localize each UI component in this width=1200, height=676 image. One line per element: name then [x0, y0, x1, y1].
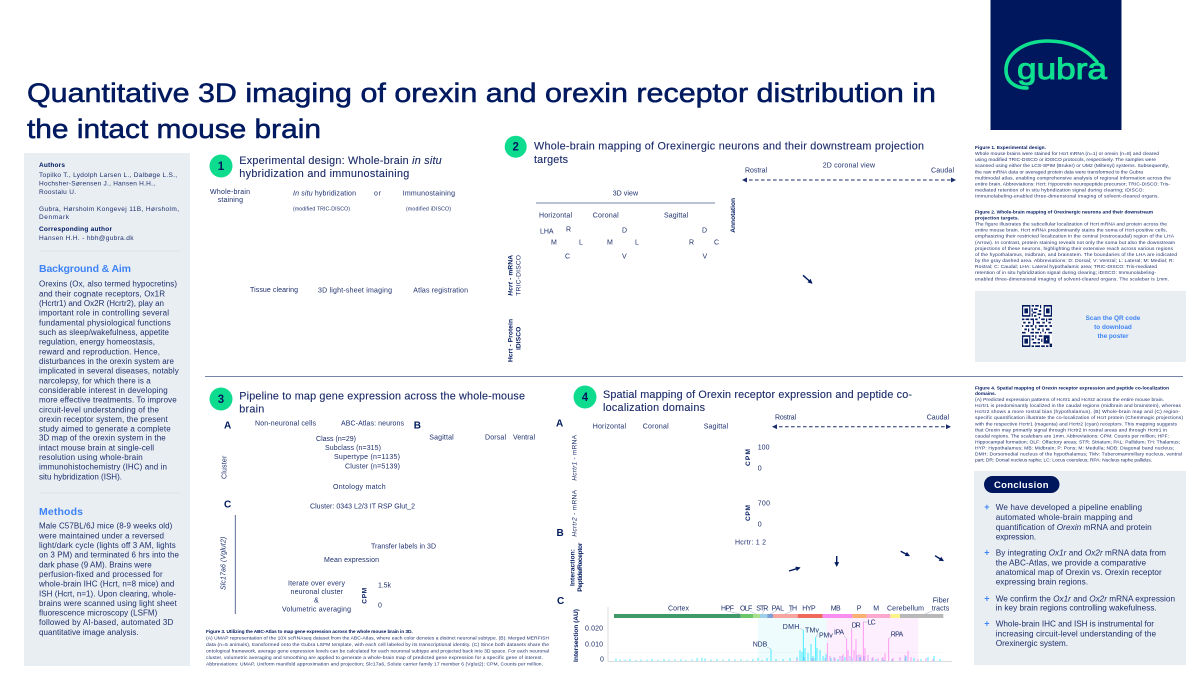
sub-panel A and B labels: Hcrtr: 1 2	[735, 540, 766, 547]
chart: region-specific colocalization: C	[557, 596, 564, 607]
text block: figure 2 caption: of the hypothalamus, midbrain, and brainstem. The boundaries of the LHA are indicated	[975, 252, 1177, 258]
text block: background: such as sleep/wakefulness, appetite	[39, 328, 170, 337]
text block: methods	[38, 522, 180, 637]
sub-panel C labels: CPM	[362, 587, 369, 604]
region labels: TH	[789, 606, 797, 613]
rotated row labels: Hcrt - mRNA	[508, 255, 515, 296]
text block: figure 3 caption: data (n=5 animals), transformed onto the Gubra LSFM template, with each cell labeled by its transcriptional identity. (C) Since both datasets share the	[206, 642, 549, 648]
heading: section 1: Experimental design: Whole-brain in situ	[239, 155, 442, 167]
text block: methods: whole-brain IHC (Hcrt, n=8 mice) and	[38, 580, 174, 589]
conclusion point 3: +	[984, 593, 990, 603]
text block: background: immunohistochemistry (IHC) and in	[39, 463, 167, 472]
QR caption: the poster	[1098, 333, 1129, 340]
sub-panel A and B labels: Cluster	[222, 455, 229, 479]
sub-panel C labels	[220, 500, 436, 614]
sub-panel A and B labels: Caudal	[927, 415, 949, 422]
heading: section 3: brain	[239, 404, 264, 416]
text block: figure 2 caption: enabled three-dimensional imaging of solvent-cleared organs. The scalebar is 1mm.	[975, 276, 1169, 282]
text block: methods: fluorescence microscopy (LSFM)	[39, 608, 158, 618]
conclusion point 1	[984, 502, 1152, 541]
text block: background: and their cognate receptors, Ox1R	[39, 289, 165, 298]
icon: section number 1: 1	[218, 161, 225, 173]
authors: Authors	[39, 162, 65, 169]
workflow labels: or	[374, 191, 382, 198]
rotated row labels: Hcrt - Protein	[508, 319, 515, 362]
conclusion point 3	[984, 593, 1175, 613]
text block: background: (Hcrtr1) and Ox2R (Hcrtr2), play an	[39, 299, 164, 308]
QR caption	[1086, 315, 1141, 340]
sub-panel A and B labels	[222, 420, 535, 491]
region labels: STR	[756, 606, 768, 613]
sub-panel A and B labels: Dorsal	[485, 434, 506, 441]
region labels: tracts	[932, 606, 950, 613]
text block: figure 3 caption: cluster, volumetric averaging and smoothing are applied to generate a whole-brain map of predicted gene expression for a specific gene of interest.	[206, 655, 543, 661]
icon: section number 1	[210, 154, 232, 178]
sub-panel C labels: neuronal cluster	[290, 589, 344, 596]
text block: figure 2 caption: (Arrow). In contrast, protein staining reveals not only the soma but also the downstream	[975, 240, 1175, 246]
conclusion point 4: Orexinergic system.	[996, 639, 1068, 648]
conclusion point 4: Whole-brain IHC and ISH is instrumental for	[996, 620, 1154, 629]
2D coronal view axis	[743, 163, 955, 180]
sub-panel A and B labels: Peptide/Receptor	[577, 542, 584, 592]
sub-panel A and B labels: Subclass (n=315)	[325, 445, 381, 452]
title: the intact mouse brain	[27, 114, 321, 144]
text block: background: implicated in several diseases, notably	[39, 367, 179, 376]
sub-panel A and B labels: Hcrtr2 - mRNA	[572, 489, 579, 537]
text block: figure 3 caption: (A) UMAP representation of the 10X scRNAseq dataset from the ABC-Atlas, where each color denotes a distinct neuronal subtype. (B): Merged MERFISH	[206, 636, 549, 642]
region labels: M	[873, 606, 879, 613]
sub-panel A and B labels: A	[224, 420, 231, 431]
panel: QR code	[975, 291, 1186, 362]
sub-panel C labels: Mean expression	[324, 557, 379, 564]
peak labels: PMv	[819, 632, 833, 639]
peak labels: NDB	[753, 642, 768, 649]
heading: section 3	[239, 390, 525, 416]
text block: background: important role in controlling several	[39, 309, 169, 318]
region labels: Cortex	[668, 606, 690, 613]
icon: section number 3	[210, 388, 232, 410]
text block: figure 2 caption: emphasizing their restricted localization in the central (rostrocaudal) region of the LHA	[975, 234, 1175, 240]
sub-panel C labels: C	[224, 500, 231, 511]
authors	[39, 162, 179, 242]
text block: background: intact mouse brain at single-cell	[39, 443, 154, 452]
3D view labels: L	[635, 240, 639, 247]
text block: background: more effective treatments. To improve	[39, 396, 177, 405]
3D view labels: Horizontal	[539, 213, 572, 220]
text block: figure 4 caption	[975, 385, 1183, 464]
sub-panel A and B labels: Class (n=29)	[316, 436, 356, 443]
region labels: HPF	[721, 606, 734, 613]
rotated row labels	[508, 198, 737, 362]
text block: methods: ISH (Hcrt, n=1). Upon clearing, whole-	[39, 589, 176, 598]
text block: figure 4 caption: DMH: Dorsomedial nucleus of the hypothalamus; TMv: Tuberomammillary nucleus, ventral	[975, 452, 1182, 458]
text block: methods: were maintained under a reversed	[38, 531, 164, 540]
icon: section number 2	[505, 136, 527, 158]
text block: methods: followed by AI-based, automated 3D	[39, 618, 174, 627]
region labels: HYP	[802, 606, 816, 613]
icon: section number 2: 2	[512, 142, 519, 154]
workflow labels: In situ hybridization	[293, 191, 356, 198]
text block: figure 4 caption: Figure 4. Spatial mapping of Orexin receptor expression and peptide co-localization	[975, 385, 1169, 391]
peak labels: TMv	[805, 627, 820, 634]
data: blue overlap signal	[797, 655, 905, 661]
sub-panel A and B labels: Horizontal	[593, 424, 626, 431]
conclusion point 4: +	[984, 619, 990, 629]
panel 1: experimental design	[210, 154, 468, 294]
sub-panel A and B labels: A	[556, 419, 563, 430]
region labels: OLF	[740, 606, 752, 613]
data: magenta Hcrtr1 signal	[797, 622, 933, 661]
text block: background: situ hybridization (ISH).	[39, 472, 122, 481]
sub-panel A and B labels	[556, 415, 950, 592]
text block: figure 1 caption: multimodal atlas, enabling comprehensive analysis of regional information across the	[975, 175, 1171, 181]
arrows: receptor domains	[789, 551, 943, 571]
text block: methods: quantitative image analysis.	[39, 628, 139, 637]
3D view labels: V	[702, 254, 708, 261]
sub-panel A and B labels: Ventral	[513, 434, 535, 441]
sub-panel A and B labels: Coronal	[643, 424, 669, 431]
text block: figure 2 caption: projection targets.	[975, 216, 1019, 222]
QR caption: Scan the QR code	[1086, 315, 1141, 322]
peak labels: DMH	[783, 624, 799, 631]
authors: Corresponding author	[39, 226, 112, 233]
text block: figure 2 caption: entire mouse brain. Hcrt mRNA predominantly stains the soma of Hcrt-positive cells,	[975, 228, 1167, 234]
text block: figure 1 caption: Immunolabeling-enabled three-dimensional imaging of solvent-cleared organs.	[975, 194, 1159, 200]
text block: figure 1 caption: scanned using either the LCS-SPIM (Bruker) or UM2 (Miltenyi) systems. Subsequently,	[975, 163, 1169, 169]
rotated row labels: Annotation	[730, 198, 737, 233]
rotated row labels: TRIC-DISCO	[516, 255, 523, 296]
sub-panel A and B labels: B	[414, 420, 421, 431]
authors: Hansen H.H. - hbh@gubra.dk	[39, 235, 134, 242]
QR caption: to download	[1094, 324, 1132, 331]
logo: gubra: gubra	[1017, 53, 1107, 86]
3D view labels: D	[702, 228, 707, 234]
panel 3: gene expression pipeline	[206, 388, 549, 667]
2D coronal view axis: 2D coronal view	[823, 163, 876, 170]
heading: section 4: Spatial mapping of Orexin receptor expression and peptide co-	[603, 389, 912, 401]
icon: section number 4	[574, 386, 596, 408]
region labels: P	[857, 606, 862, 613]
text block: background: circuit-level understanding of the	[39, 405, 160, 414]
panel 4: spatial mapping of receptors	[556, 386, 952, 664]
text block: figure 2 caption: by the gray dashed area. Abbreviations: D: Dorsal; V: Ventral; L: Lateral; M: Medial; R:	[975, 258, 1174, 264]
conclusion point 3: We confirm the Ox1r and Ox2r mRNA expression	[996, 594, 1175, 603]
text block: background: orexin receptor system, the present	[39, 415, 168, 424]
text block: background: Orexins (Ox, also termed hypocretins)	[39, 280, 177, 289]
peak labels: LC	[868, 619, 876, 626]
text block: background: narcolepsy, for which there is a	[39, 376, 151, 385]
heading: section 1	[239, 155, 442, 180]
icon: section number 4: 4	[582, 392, 589, 404]
3D view labels: Coronal	[593, 213, 619, 220]
panel: authors, background and methods sidebar	[24, 153, 190, 666]
sub-panel C labels: &	[314, 597, 319, 604]
3D view labels: Sagittal	[664, 213, 688, 220]
panel: conclusion	[974, 471, 1186, 665]
text block: figure 1 caption: Figure 1. Experimental design.	[975, 145, 1046, 151]
text block: figure 4 caption: part; DR: Dorsal nucleus raphe; LC: Locus coeruleus; RPA: Nucleus raphe pallidus.	[975, 458, 1152, 464]
sub-panel A and B labels: Hcrtr1 - mRNA	[572, 434, 579, 481]
sub-panel C labels: 1.5k	[378, 583, 392, 590]
text block: figure 1 caption: Whole mouse brains were stained for Hcrt mRNA (n=1) or orexin (n=8) and cleared	[975, 151, 1159, 157]
heading: section 4: localization domains	[603, 402, 706, 414]
text block: methods: brains were scanned using light sheet	[39, 599, 177, 608]
text block: figure 4 caption: HYP: Hypothalamus; MB: Midbrain; P: Pons; M: Medulla; NDB: Diagonal band nucleus;	[975, 446, 1174, 452]
text block: figure 4 caption: Hcrtr1 is predominantly localized in the caudal regions (midbrain and brainstem), whereas	[975, 403, 1182, 409]
text block: methods: light/dark cycle (lights off 3 AM, lights	[39, 541, 176, 550]
region labels	[668, 598, 950, 613]
3D view labels: R	[689, 240, 694, 247]
workflow labels: 3D light-sheet imaging	[318, 288, 392, 294]
region labels: PAL	[772, 606, 784, 613]
heading: methods: Methods	[39, 506, 83, 518]
icon: section number 3: 3	[218, 394, 224, 406]
text block: background: study aimed to generate a complete	[39, 424, 171, 433]
text block: background	[39, 280, 179, 481]
data: cyan Hcrtr2 signal	[616, 630, 940, 661]
sub-panel A and B labels: Ontology match	[333, 484, 386, 491]
2D coronal view axis: Caudal	[931, 168, 954, 175]
conclusion point 2	[984, 548, 1166, 586]
conclusion point 4: increasing circuit-level understanding of the	[996, 629, 1156, 638]
sub-panel A and B labels: ABC-Atlas: neurons	[341, 421, 404, 428]
title: Quantitative 3D imaging of orexin and orexin receptor distribution in	[27, 78, 936, 108]
text block: figure 3 caption	[206, 629, 549, 667]
text block: figure 4 caption: that Orexin may primarily signal through Hcrtr2 in rostral areas and through Hcrtr1 in	[975, 427, 1167, 433]
axis labels	[573, 609, 604, 664]
text block: methods: dark phase (9 AM). Brains were	[39, 560, 152, 569]
text block: background: resolution using whole-brain	[39, 453, 143, 462]
region labels: Fiber	[933, 598, 950, 605]
sub-panel C labels: Slc17a6 (Vglut2)	[220, 537, 228, 590]
sub-panel C labels: Iterate over every	[288, 581, 346, 588]
text block: figure 4 caption: Hippocampal formation; OLF: Olfactory areas; STR: Striatum; PAL: Pallidum; TH: Thalamus;	[975, 440, 1180, 446]
conclusion point 2: the ABC-Atlas, we provide a comparative	[996, 558, 1146, 567]
arrow: LHA	[803, 275, 812, 283]
workflow labels: Immunostaining	[403, 191, 455, 198]
axis labels: Intersection (AU)	[573, 609, 580, 662]
heading: background and aim: Background & Aim	[39, 263, 131, 275]
peak labels: RPA	[891, 632, 904, 639]
authors: Denmark	[39, 214, 70, 221]
text block: figure 3 caption: ontological framework, average gene expression levels can be calculated for each neuronal subtype and projected back into 3D space. For each neuronal	[206, 648, 549, 654]
text block: figure 4 caption: specific quantification illustrate the co-localization of Hcrt protein (Chemmagic projections)	[975, 415, 1183, 421]
text block: figure 1 caption: using modified TRIC-DISCO or iDISCO protocols, respectively. The samples were	[975, 157, 1156, 163]
3D view labels: 3D view	[613, 191, 639, 198]
axis labels: 0	[600, 657, 604, 664]
sub-panel C labels: Cluster: 0343 L2/3 IT RSP Glut_2	[310, 504, 415, 511]
conclusion point 1: We have developed a pipeline enabling	[996, 503, 1142, 512]
heading: section 2: targets	[534, 154, 569, 166]
text block: figure 4 caption: caudal regions. The scalebars are 1mm. Abbreviations: CPM: Counts per million; HPF:	[975, 433, 1169, 439]
authors: Roostalu U.	[39, 189, 76, 196]
text block: background: 3D map of the orexin system in the	[39, 434, 166, 443]
text block: figure 1 caption: mediated retention of in situ hybridization signal during clearing; iDISCO:	[975, 188, 1144, 194]
sub-panel A and B labels: Rostral	[775, 415, 796, 422]
authors: Hochsher-Sørensen J., Hansen H.H.,	[39, 181, 155, 188]
heading: section 2	[534, 141, 924, 166]
region colour bar	[614, 614, 943, 618]
3D view labels: R	[566, 227, 571, 234]
heading: section 3: Pipeline to map gene expression across the whole-mouse	[239, 390, 525, 402]
workflow labels: (modified TRIC-DISCO)	[293, 207, 350, 213]
3D view labels: M	[551, 240, 557, 247]
peak labels: IPA	[834, 629, 844, 636]
text block: methods: Male C57BL/6J mice (8-9 weeks old)	[39, 522, 173, 531]
text block: figure 1 caption	[975, 145, 1171, 200]
3D view labels: LHA	[540, 229, 554, 236]
logo: gubra	[990, 0, 1122, 130]
text block: figure 4 caption: domains.	[975, 391, 996, 397]
text block: methods: on 3 PM) and terminated 6 hrs into the	[39, 551, 180, 560]
authors: Gubra, Hørsholm Kongevej 11B, Hørsholm,	[39, 206, 179, 213]
workflow labels: Whole-brain	[210, 189, 250, 196]
sub-panel A and B labels: CPM	[745, 504, 752, 521]
3D view labels: L	[579, 240, 583, 247]
sub-panel A and B labels: Supertype (n=1135)	[334, 454, 400, 461]
3D view labels: V	[622, 254, 627, 261]
region labels: MB	[831, 606, 841, 613]
axis labels: 0.010	[585, 642, 603, 649]
sub-panel A and B labels: Interaction:	[569, 549, 576, 586]
peak labels	[727, 611, 932, 649]
text block: figure 3 caption: Abbreviations: UMAP, Uniform manifold approximation and projection; Slc17a6, Solute carrier family 17 member 6 (Vglut2); CPM, Counts per million.	[206, 661, 543, 667]
conclusion point 2: By integrating Ox1r and Ox2r mRNA data from	[996, 549, 1166, 558]
conclusion point 3: in key brain regions controlling wakefulness.	[996, 604, 1157, 613]
text block: figure 1 caption: the raw mRNA data or averaged protein data were transformed to the Gubra	[975, 169, 1143, 175]
text block: figure 2 caption	[975, 209, 1177, 282]
workflow labels: Tissue clearing	[250, 287, 298, 294]
sub-panel A and B labels: 0	[758, 466, 762, 473]
3D view labels: D	[622, 228, 627, 234]
sub-panel A and B labels: 100	[758, 445, 770, 452]
sub-panel C labels: 0	[378, 603, 382, 610]
conclusion point 1: automated whole-brain mapping and	[996, 513, 1133, 522]
sub-panel A and B labels: Sagittal	[429, 434, 454, 441]
3D view labels	[536, 191, 719, 261]
text block: figure 3 caption: Figure 3. Utilizing the ABC-Atlas to map gene expression across the whole mouse brain in 3D.	[206, 629, 413, 635]
text block: background: fundamental physiological functions	[39, 318, 171, 327]
rotated row labels: iDISCO	[516, 327, 523, 350]
heading: section 2: Whole-brain mapping of Orexinergic neurons and their downstream projection	[534, 141, 924, 153]
workflow labels: (modified iDISCO)	[406, 207, 451, 213]
authors: Topilko T., Lydolph Larsen L., Dalbøge L.S.,	[39, 172, 177, 179]
conclusion point 2: +	[984, 548, 990, 558]
icon: QR code	[1022, 305, 1052, 347]
panel 2: whole-brain mapping	[505, 136, 955, 362]
sub-panel C labels: Transfer labels in 3D	[371, 544, 436, 551]
sub-panel A and B labels: B	[556, 528, 564, 539]
text block: figure 2 caption: projections of these neurons, highlighting their extensive reach across various regions	[975, 246, 1174, 252]
heading: conclusion pill	[984, 476, 1060, 493]
conclusion point 4	[984, 619, 1156, 648]
conclusion point 2: anatomical map of Orexin vs. Orexin receptor	[996, 568, 1162, 577]
conclusion point 1: quantification of Orexin mRNA and protein	[996, 523, 1152, 532]
3D view labels: C	[714, 240, 719, 247]
heading: section 1: hybridization and immunostaining	[239, 168, 409, 180]
text block: background: regulation, energy homeostasis,	[39, 338, 155, 347]
conclusion point 2: expressing brain regions.	[996, 577, 1088, 586]
sub-panel C labels: Volumetric averaging	[282, 607, 351, 614]
text block: figure 4 caption: with the respective Hcrtr1 (magenta) and Hcrtr2 (cyan) receptors. This mapping suggests	[975, 421, 1178, 427]
sub-panel A and B labels: 0	[758, 522, 762, 529]
text block: figure 2 caption: retention of in situ hybridization signal during clearing; iDISCO: Immunolabeling-	[975, 270, 1156, 276]
conclusion point 1: expression.	[996, 532, 1036, 541]
conclusion point 1: +	[984, 502, 990, 512]
sub-panel A and B labels: Cluster (n=5139)	[345, 463, 400, 470]
workflow labels: Atlas registration	[413, 288, 468, 294]
text block: figure 4 caption: (A) Predicted expression patterns of Hcrtr1 and Hcrtr2 across the entire mouse brain.	[975, 397, 1164, 403]
text block: figure 1 caption: entire brain. Abbreviations: Hcrt: Hypocretin neuropeptide precursor; TRIC-DISCO: Tris-	[975, 181, 1170, 187]
sub-panel A and B labels: Sagittal	[704, 424, 728, 431]
workflow labels: staining	[218, 197, 243, 204]
title	[27, 78, 936, 144]
sub-panel A and B labels: Non-neuronal cells	[255, 421, 316, 428]
sub-panel A and B labels: CPM	[745, 448, 752, 466]
3D view labels: C	[565, 254, 570, 261]
chart: region-specific colocalization	[557, 596, 952, 664]
text block: figure 2 caption: Figure 2. Whole-brain mapping of Orexinergic neurons and their downstream	[975, 209, 1153, 215]
text block: methods: perfusion-fixed and processed for	[39, 570, 163, 579]
text block: background: considerable interest in developing	[39, 386, 168, 395]
text block: figure 4 caption: Hcrtr2 shows a more rostral bias (hypothalamus). (B) Whole-brain map and (C) region-	[975, 409, 1180, 415]
sub-panel A and B labels: 700	[758, 501, 770, 508]
peak labels: DR	[852, 622, 861, 629]
text block: figure 2 caption: The figure illustrates the subcellular localization of Hcrt mRNA and protein across the	[975, 222, 1167, 228]
region labels: Cerebellum	[887, 606, 924, 613]
text block: figure 2 caption: Rostral; C: Caudal; LHA: Lateral hypothalamic area; TRIC-DISCO: Tris-mediated	[975, 264, 1157, 270]
heading: conclusion pill: Conclusion	[994, 480, 1049, 491]
text block: background: disturbances in the orexin system are	[39, 357, 175, 366]
text block: background: reward and reproduction. Hence,	[39, 347, 160, 356]
heading: section 4	[603, 389, 912, 414]
2D coronal view axis: Rostral	[745, 168, 767, 175]
3D view labels: M	[607, 240, 613, 247]
axis labels: 0.020	[585, 626, 603, 633]
workflow labels	[210, 189, 468, 294]
